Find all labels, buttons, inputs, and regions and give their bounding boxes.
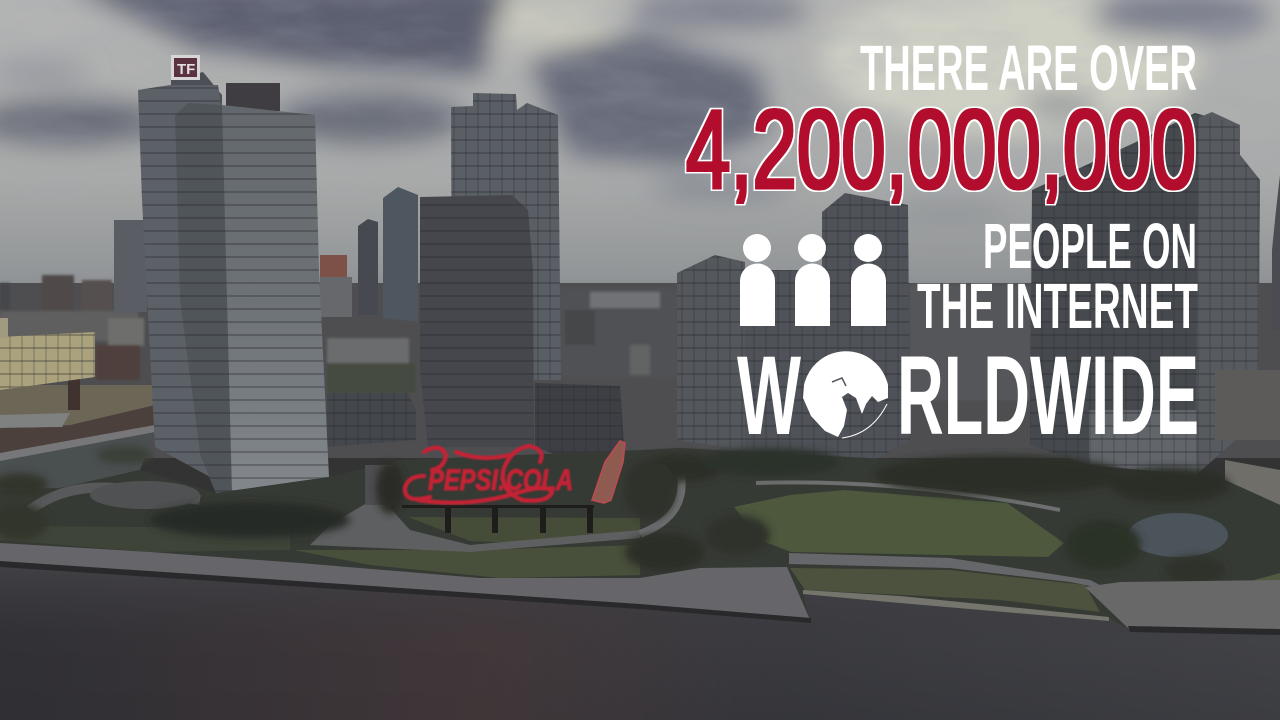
icon: globe replacing the O — [803, 351, 888, 438]
sign lettering: PEPSI:COLA — [428, 464, 573, 497]
neon bottle — [592, 441, 625, 503]
sign lettering — [405, 446, 573, 503]
small towers behind — [114, 187, 418, 447]
industrial waterfront, left — [0, 385, 160, 425]
text: W of worldwide: W — [737, 333, 801, 458]
Pepsi-Cola neon sign — [402, 441, 625, 533]
central rear tower — [451, 93, 561, 380]
park ground and trees — [0, 446, 1280, 632]
sign posts — [402, 505, 594, 533]
river water — [0, 567, 1280, 720]
right-centre towers — [677, 193, 910, 462]
background: cloudy sky — [0, 0, 1280, 320]
far right towers — [1030, 112, 1280, 505]
rear left tower with TF sign — [138, 55, 225, 478]
front left tower — [175, 83, 329, 493]
icon: TF rooftop sign — [171, 55, 200, 80]
lawn along the pier — [294, 545, 640, 578]
distant city skyline — [0, 275, 1280, 490]
main lawn — [734, 490, 1064, 557]
waterfront promenade — [0, 543, 1280, 635]
icon: three people — [740, 234, 886, 326]
central front tower — [420, 195, 625, 466]
infographic text overlay — [686, 32, 1199, 458]
riverside grass — [790, 568, 1100, 612]
lawn under the sign — [408, 517, 640, 545]
round pavilions — [90, 481, 200, 509]
yellow low-rise building — [0, 318, 95, 390]
plaza and footpaths — [310, 495, 640, 552]
icon: TF rooftop sign: TF — [177, 61, 195, 78]
